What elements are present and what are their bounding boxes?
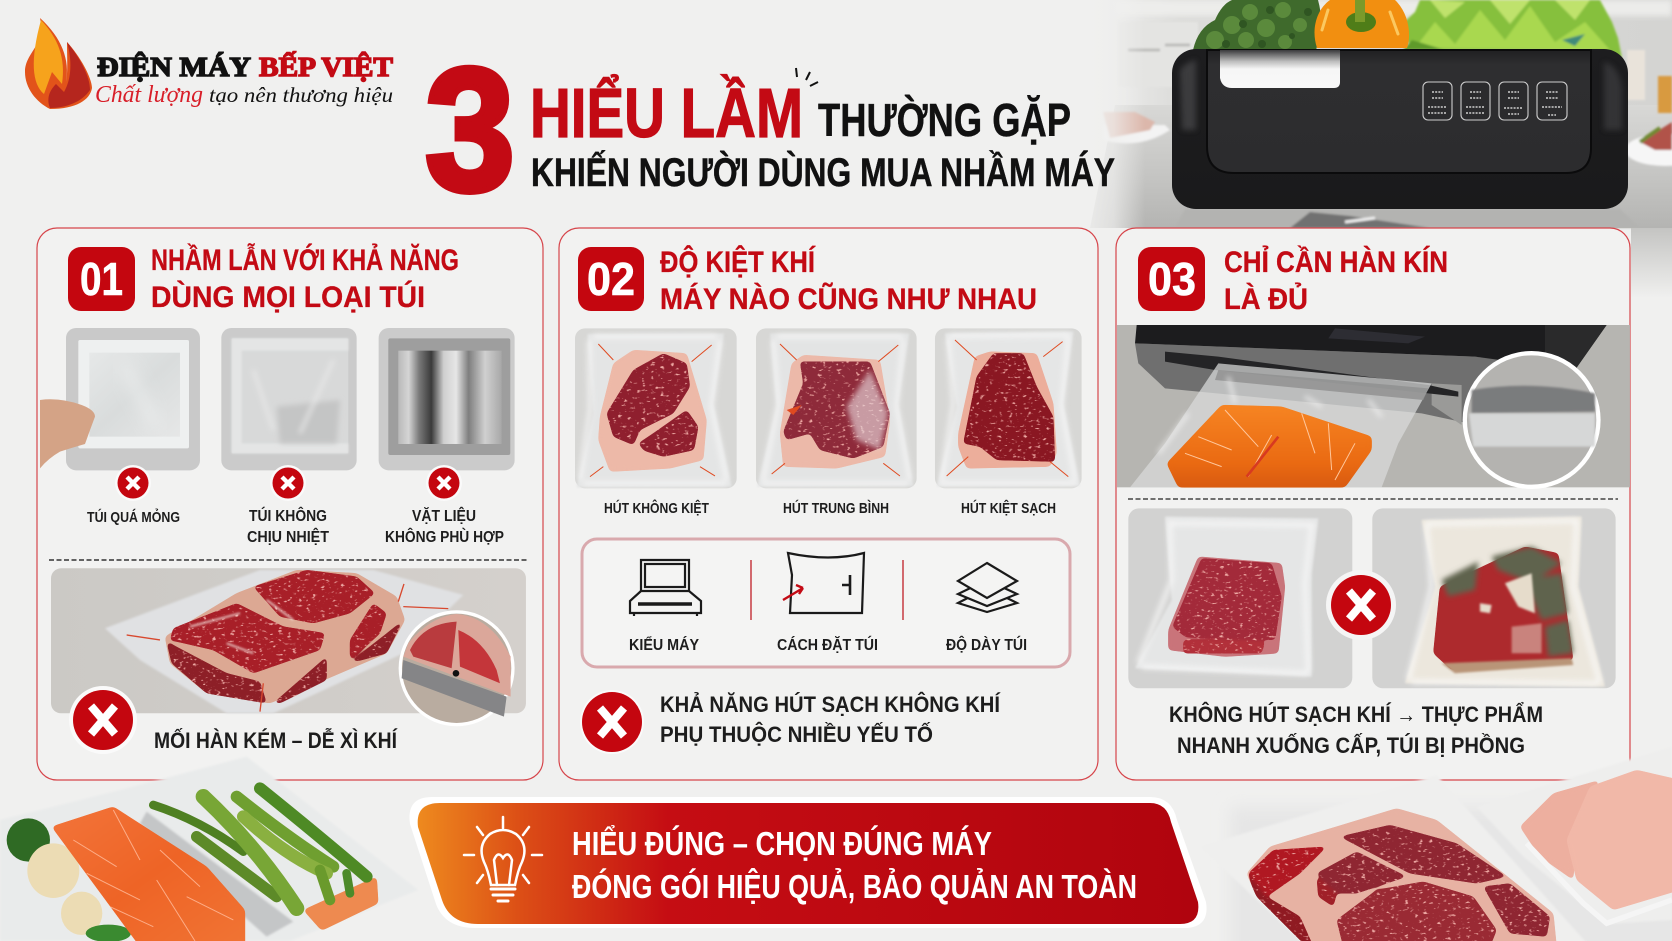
chicken left xyxy=(1520,780,1600,880)
salmon fat lines xyxy=(73,810,233,941)
floor shadow xyxy=(1230,807,1672,941)
title red words: HIỂU LẦM xyxy=(530,73,803,152)
card: good vacuum steak xyxy=(1128,508,1352,688)
title second line: KHIẾN NGƯỜI DÙNG MUA NHẦM MÁY xyxy=(531,149,1115,195)
card: heat-intolerant bag xyxy=(221,328,357,470)
icon: machine xyxy=(630,560,701,616)
steak xyxy=(165,570,405,703)
top white band xyxy=(1115,0,1672,16)
panel 2 heading: MÁY NÀO CŨNG NHƯ NHAU xyxy=(660,282,1037,316)
badge 02 xyxy=(578,247,644,311)
plate right xyxy=(1625,122,1672,166)
panel 2 heading: ĐỘ KIỆT KHÍ xyxy=(660,245,816,279)
icon: light bulb xyxy=(464,817,542,901)
salmon fillet xyxy=(52,807,245,941)
card: spoiled steak xyxy=(1372,508,1616,688)
title black word: THƯỜNG GẶP xyxy=(818,94,1071,146)
panel 3 heading: LÀ ĐỦ xyxy=(1224,282,1308,316)
beef lobes xyxy=(1340,825,1507,883)
badge 01 xyxy=(68,247,135,311)
badge 03: 03 xyxy=(1148,253,1196,305)
chicken bag xyxy=(1477,747,1672,924)
label: wrong material: KHÔNG PHÙ HỢP xyxy=(385,527,504,546)
carrot strip xyxy=(303,877,378,931)
icon: x 3 xyxy=(426,465,462,501)
pepper bottom xyxy=(86,925,131,941)
bag edge xyxy=(1527,843,1672,923)
inset: seal closeup xyxy=(1463,351,1601,489)
beef bag xyxy=(1200,775,1590,941)
icon: x between bags xyxy=(1326,570,1396,640)
machine lid xyxy=(1207,50,1591,173)
machine body xyxy=(1172,49,1628,209)
left white fade xyxy=(1075,0,1145,228)
beef fat xyxy=(1247,808,1557,941)
lettuce xyxy=(1401,0,1622,58)
bell pepper xyxy=(1315,0,1409,48)
banner text: HIỂU ĐÚNG – CHỌN ĐÚNG MÁY xyxy=(572,825,992,862)
icon: bag placement xyxy=(783,553,864,613)
caption: depends on factors: PHỤ THUỘC NHIỀU YẾU TỐ xyxy=(660,721,933,747)
bottle right xyxy=(1658,76,1672,113)
label: thin bag: TÚI QUÁ MỎNG xyxy=(87,508,180,526)
plate left xyxy=(1103,112,1170,143)
big numeral 3: 3 xyxy=(425,33,515,228)
footer food left xyxy=(0,757,418,941)
panel frame xyxy=(1116,228,1630,780)
panel 3 heading: CHỈ CẦN HÀN KÍN xyxy=(1224,245,1448,279)
panel frame xyxy=(37,228,543,780)
counter xyxy=(1090,105,1672,228)
label: machine type: KIỂU MÁY xyxy=(629,635,699,654)
control buttons xyxy=(1423,82,1567,120)
caption: depends on factors xyxy=(660,692,1001,747)
caption: poor seal: MỐI HÀN KÉM – DỄ XÌ KHÍ xyxy=(154,727,398,753)
body highlight right xyxy=(1604,62,1622,130)
panel frame xyxy=(559,228,1098,780)
caption: consequence xyxy=(1169,702,1543,758)
banner text xyxy=(572,825,1137,905)
photo: salmon being sealed xyxy=(1117,325,1630,487)
card: fully vacuumed xyxy=(935,328,1082,488)
label: not vacuumed: HÚT KHÔNG KIỆT xyxy=(604,499,709,517)
panel 1 heading: DÙNG MỌI LOẠI TÚI xyxy=(151,280,425,314)
caption: consequence: NHANH XUỐNG CẤP, TÚI BỊ PHỒNG xyxy=(1177,732,1525,758)
fade below hero right xyxy=(1631,228,1672,298)
label: clean: HÚT KIỆT SẠCH xyxy=(961,499,1056,517)
label: not heat resistant: CHỊU NHIỆT xyxy=(247,527,329,546)
label: wrong material xyxy=(385,506,504,546)
card: thin bag with hand xyxy=(40,328,200,470)
tagline red: Chất lượng xyxy=(95,82,203,108)
icon: x 2 xyxy=(270,465,306,501)
banner fill xyxy=(418,803,1198,924)
card: not fully vacuumed xyxy=(575,328,737,488)
vacuum bag left xyxy=(0,757,418,941)
white label xyxy=(1220,50,1340,88)
logo name red: BẾP VIỆT xyxy=(259,51,393,82)
broccoli xyxy=(1193,0,1321,50)
label: wrong material: VẶT LIỆU xyxy=(412,506,476,525)
panel 3 heading xyxy=(1224,245,1448,316)
icon: layers xyxy=(958,563,1017,612)
body highlight left xyxy=(1180,60,1196,130)
label: medium: HÚT TRUNG BÌNH xyxy=(783,499,889,517)
green beans xyxy=(153,788,367,908)
panel 2 heading xyxy=(660,245,1037,316)
card: foil bag xyxy=(379,328,515,470)
factor box xyxy=(582,539,1070,667)
panel 1: bag misconception xyxy=(37,228,543,780)
badge 02: 02 xyxy=(587,253,635,305)
chicken right xyxy=(1567,770,1672,910)
banner text: ĐÓNG GÓI HIỆU QUẢ, BẢO QUẢN AN TOÀN xyxy=(572,868,1137,905)
glass right xyxy=(1627,50,1645,100)
label: not heat resistant xyxy=(247,506,329,546)
emphasis rays xyxy=(796,68,818,86)
silver strip xyxy=(140,812,293,937)
counter reflection xyxy=(1175,209,1640,228)
label: bag thickness: ĐỘ DÀY TÚI xyxy=(946,635,1027,654)
inset: seal leak detail xyxy=(399,610,515,726)
panel 2: vacuum level misconception xyxy=(559,228,1098,780)
panel 3: sealing misconception xyxy=(1116,228,1630,780)
footer food right xyxy=(1200,747,1672,941)
garlic cloves xyxy=(27,843,102,935)
icon: flame xyxy=(25,18,92,109)
green pepper xyxy=(7,818,50,862)
tagline black: tạo nên thương hiệu xyxy=(209,83,393,107)
caption: consequence: KHÔNG HÚT SẠCH KHÍ → THỰC PHẨM xyxy=(1169,702,1543,727)
title xyxy=(425,33,1115,228)
footer banner xyxy=(409,797,1207,928)
card: medium vacuum xyxy=(756,328,917,488)
panel 1 heading: NHẦM LẪN VỚI KHẢ NĂNG xyxy=(151,243,459,277)
photo: leaking seal steak xyxy=(51,568,526,713)
caption: depends on factors: KHẢ NĂNG HÚT SẠCH KHÔNG KHÍ xyxy=(660,692,1001,717)
icon: large x xyxy=(69,686,137,754)
label: not heat resistant: TÚI KHÔNG xyxy=(249,506,327,525)
icon: large x xyxy=(580,690,644,754)
logo xyxy=(25,18,393,109)
cabinet detail xyxy=(1118,22,1198,87)
icon: x 1 xyxy=(115,465,151,501)
label: bag placement: CÁCH ĐẶT TÚI xyxy=(777,635,878,654)
panel 1 heading xyxy=(151,243,459,314)
badge 01: 01 xyxy=(80,253,123,305)
kitchen backdrop xyxy=(1085,0,1672,228)
logo name: ĐIỆN MÁY xyxy=(97,52,251,82)
banner white frame xyxy=(409,797,1207,928)
hero photo: vacuum sealer xyxy=(1075,0,1672,298)
badge 03 xyxy=(1138,247,1205,311)
